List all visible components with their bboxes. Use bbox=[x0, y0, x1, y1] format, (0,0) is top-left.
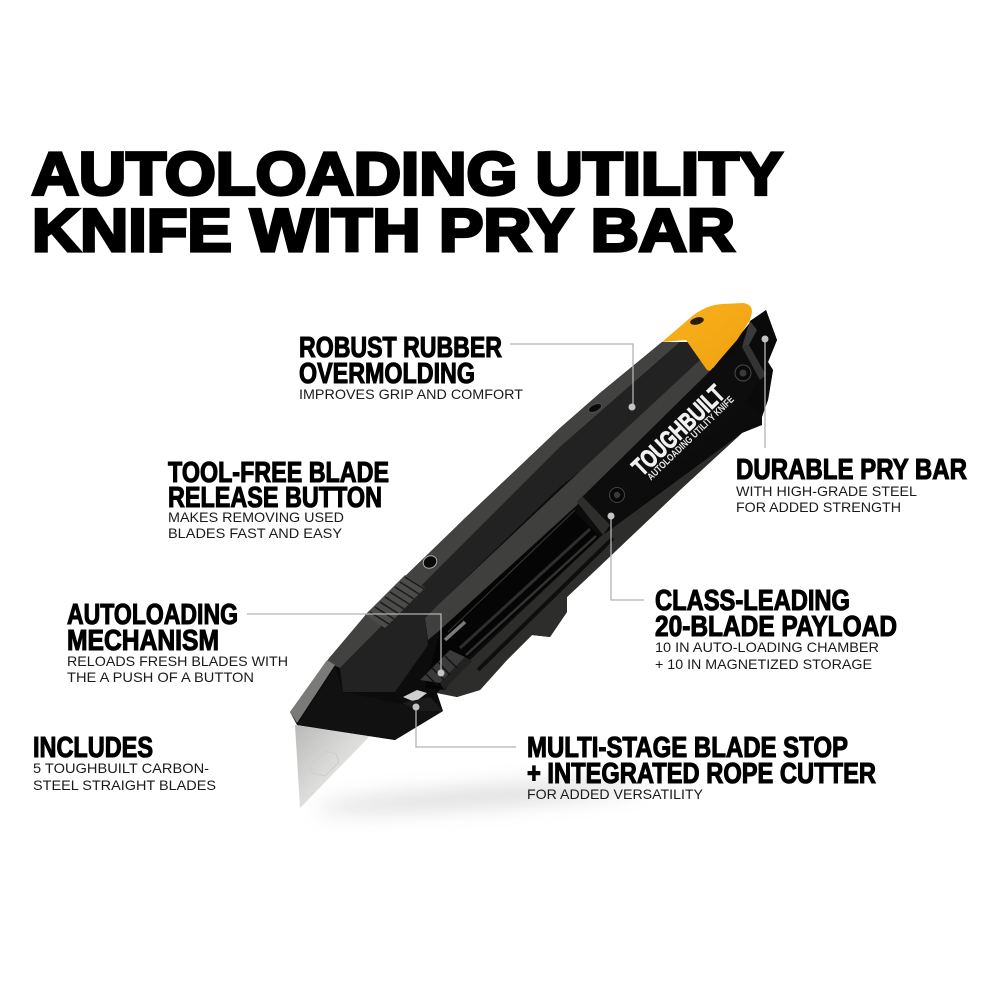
upper grey facet bbox=[327, 342, 680, 668]
plate screw bbox=[610, 488, 624, 502]
branded plate bbox=[577, 347, 760, 535]
pry bar bbox=[735, 310, 777, 415]
knife body silhouette bbox=[290, 310, 777, 740]
leader line bbox=[510, 344, 636, 410]
brand text: AUTOLOADING UTILITY KNIFE bbox=[646, 394, 737, 483]
callout: includes bbox=[33, 732, 216, 793]
callout: durable pry bar: WITH HIGH-GRADE STEEL bbox=[736, 483, 917, 499]
blade bbox=[295, 725, 370, 808]
title: AUTOLOADING UTILITY bbox=[32, 140, 783, 207]
callout: tool-free blade release button: BLADES FAST AND EASY bbox=[168, 525, 343, 541]
callout: robust rubber overmolding: ROBUST RUBBER bbox=[299, 332, 502, 364]
callout: tool-free blade release button: RELEASE BUTTON bbox=[168, 482, 382, 514]
callout: robust rubber overmolding: IMPROVES GRIP AND COMFORT bbox=[299, 386, 523, 402]
callout: tool-free blade release button: TOOL-FREE BLADE bbox=[168, 457, 389, 489]
callout: robust rubber overmolding: OVERMOLDING bbox=[299, 358, 475, 390]
callout: class-leading payload: 20-BLADE PAYLOAD bbox=[655, 611, 897, 643]
callout: includes: INCLUDES bbox=[33, 732, 153, 764]
knife shadow bbox=[315, 777, 645, 817]
callout: autoloading mechanism: THE A PUSH OF A BUTTON bbox=[67, 669, 254, 685]
callout: autoloading mechanism: MECHANISM bbox=[67, 625, 219, 657]
callout: tool-free blade release button: MAKES REMOVING USED bbox=[168, 509, 344, 525]
callout: durable pry bar bbox=[736, 336, 967, 515]
knife illustration bbox=[290, 303, 777, 808]
central dark facet bbox=[340, 342, 707, 692]
leader line bbox=[608, 512, 644, 600]
callout: durable pry bar: FOR ADDED STRENGTH bbox=[736, 499, 901, 515]
callout: class-leading payload: 10 IN AUTO-LOADING CHAMBER bbox=[655, 639, 879, 655]
slider button bbox=[420, 650, 472, 690]
brand text: TOUGHBUILT bbox=[627, 380, 730, 481]
callout: robust rubber overmolding bbox=[299, 332, 636, 410]
callout: multi-stage blade stop: FOR ADDED VERSATILITY bbox=[527, 786, 704, 802]
body screws bbox=[421, 402, 603, 571]
leader line bbox=[247, 614, 444, 676]
callout: autoloading mechanism: RELOADS FRESH BLADES WITH bbox=[67, 653, 288, 669]
callout: multi-stage blade stop: MULTI-STAGE BLADE STOP bbox=[527, 732, 848, 764]
callout: includes: 5 TOUGHBUILT CARBON- bbox=[33, 760, 209, 776]
front nose bbox=[290, 660, 443, 740]
callout: class-leading payload: + 10 IN MAGNETIZED STORAGE bbox=[655, 656, 872, 672]
callout: tool-free blade release button bbox=[168, 457, 389, 541]
blade chamber bbox=[425, 510, 600, 690]
callout: class-leading payload: CLASS-LEADING bbox=[655, 585, 850, 617]
callout: multi-stage blade stop bbox=[412, 704, 876, 802]
yellow end cap bbox=[662, 303, 752, 371]
magazine grip bbox=[437, 433, 742, 697]
title bbox=[32, 140, 783, 264]
brand text bbox=[627, 378, 737, 486]
callout: autoloading mechanism: AUTOLOADING bbox=[67, 599, 238, 631]
callout: autoloading mechanism bbox=[67, 599, 444, 685]
callout: includes: STEEL STRAIGHT BLADES bbox=[33, 777, 216, 793]
callout: class-leading payload bbox=[608, 512, 897, 672]
title: KNIFE WITH PRY BAR bbox=[32, 197, 735, 264]
callout: multi-stage blade stop: + INTEGRATED ROPE CUTTER bbox=[527, 758, 876, 790]
grip ridges bbox=[365, 575, 425, 628]
leader line bbox=[412, 704, 516, 747]
leader line bbox=[762, 336, 768, 448]
lower grey facet bbox=[425, 360, 710, 640]
